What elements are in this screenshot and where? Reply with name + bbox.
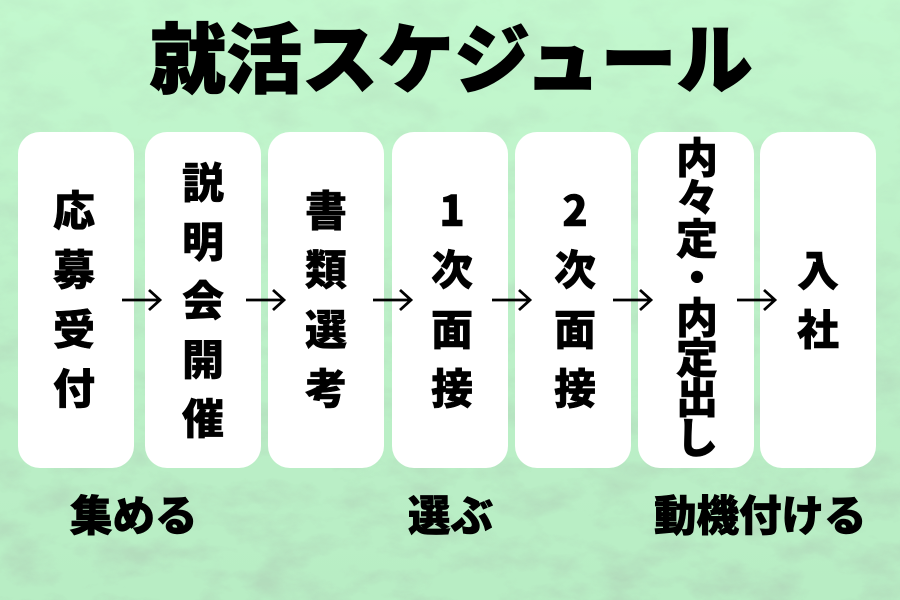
- panel: 説明会開催: 催: [182, 396, 224, 443]
- panel: 内々定・内定出し: 出: [676, 375, 718, 422]
- panel: 内々定・内定出し: 定: [676, 335, 718, 382]
- panel: 説明会開催: 会: [182, 278, 224, 325]
- panel: 1次面接: 1: [439, 178, 465, 239]
- panel: 書類選考: 選: [305, 307, 347, 354]
- label: 集める: 集める: [70, 494, 198, 541]
- panel: 内々定・内定出し: 内: [676, 295, 718, 342]
- panel: 入社: 社: [797, 307, 839, 354]
- panel: 入社: 入: [797, 248, 839, 295]
- panel: 説明会開催: 明: [182, 219, 224, 266]
- panel: 説明会開催: [145, 132, 261, 468]
- arrow 3: [373, 290, 411, 310]
- arrow 1: [122, 290, 160, 310]
- panel: 書類選考: 類: [305, 247, 347, 294]
- panel: 説明会開催: 開: [182, 337, 224, 384]
- panel: 2次面接: 接: [554, 366, 596, 413]
- panel: 応募受付: 募: [53, 247, 95, 294]
- panel: 1次面接: 面: [431, 307, 473, 354]
- arrow 6: [737, 290, 775, 310]
- panel: 内々定・内定出し: ・: [676, 255, 718, 302]
- panel: 1次面接: [392, 132, 508, 468]
- arrow 4: [492, 290, 530, 310]
- panel: 書類選考: [268, 132, 384, 468]
- arrow 5: [613, 290, 651, 310]
- panel: 2次面接: [515, 132, 631, 468]
- panel: 書類選考: 書: [305, 188, 347, 235]
- panel: 1次面接: 次: [431, 247, 473, 294]
- panel: 内々定・内定出し: 々: [676, 175, 718, 222]
- panel: 内々定・内定出し: 内: [676, 135, 718, 182]
- panel: 応募受付: [18, 132, 134, 468]
- panel: 応募受付: 受: [53, 307, 95, 354]
- panel: 内々定・内定出し: 定: [676, 216, 718, 263]
- panel: 応募受付: 応: [53, 188, 95, 235]
- panel: 応募受付: 付: [53, 366, 95, 413]
- panel: 2次面接: 2: [562, 178, 588, 239]
- panel: 内々定・内定出し: し: [676, 415, 718, 462]
- panel: 入社: [760, 132, 876, 468]
- panel: 2次面接: 次: [554, 247, 596, 294]
- panel: 書類選考: 考: [305, 366, 347, 413]
- panel: 内々定・内定出し: [638, 132, 754, 468]
- panel: 2次面接: 面: [554, 307, 596, 354]
- title: 就活スケジュール: [150, 19, 753, 104]
- label: 動機付ける: 動機付ける: [654, 494, 867, 541]
- panel: 1次面接: 接: [431, 366, 473, 413]
- panel: 説明会開催: 説: [182, 160, 224, 207]
- label: 選ぶ: 選ぶ: [408, 494, 494, 541]
- arrow 2: [246, 290, 284, 310]
